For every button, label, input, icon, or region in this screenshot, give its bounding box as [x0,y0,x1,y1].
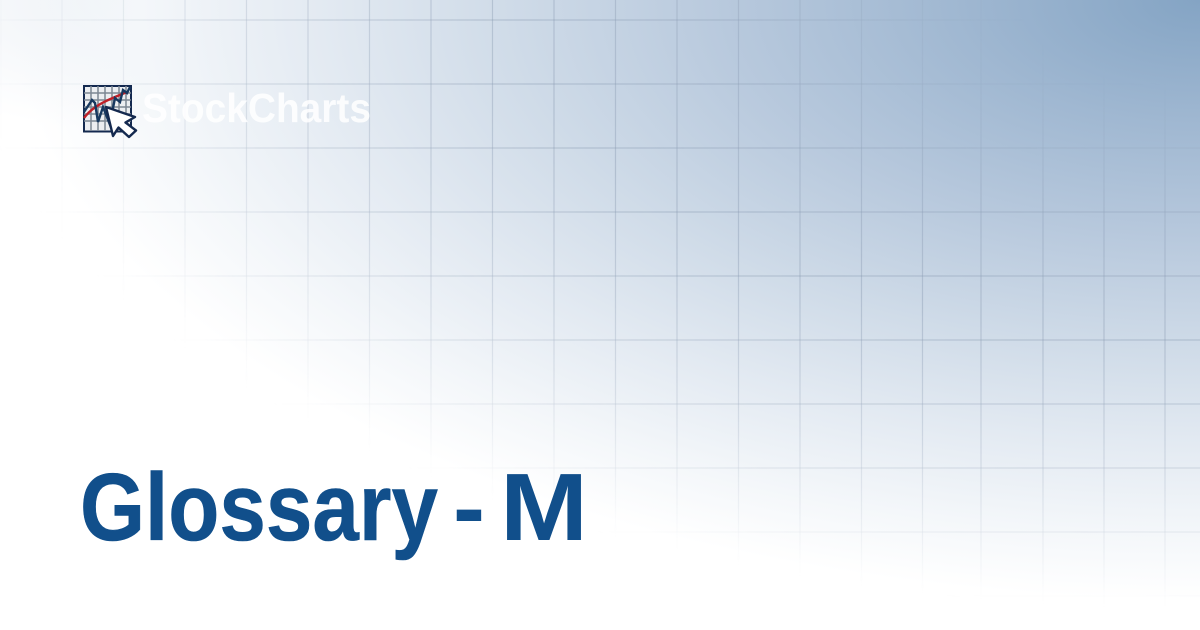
logo: StockCharts [83,85,371,138]
title: - [453,454,485,561]
title: Glossary [80,454,438,561]
title: M [500,454,588,561]
icon: chart with cursor [84,86,136,137]
